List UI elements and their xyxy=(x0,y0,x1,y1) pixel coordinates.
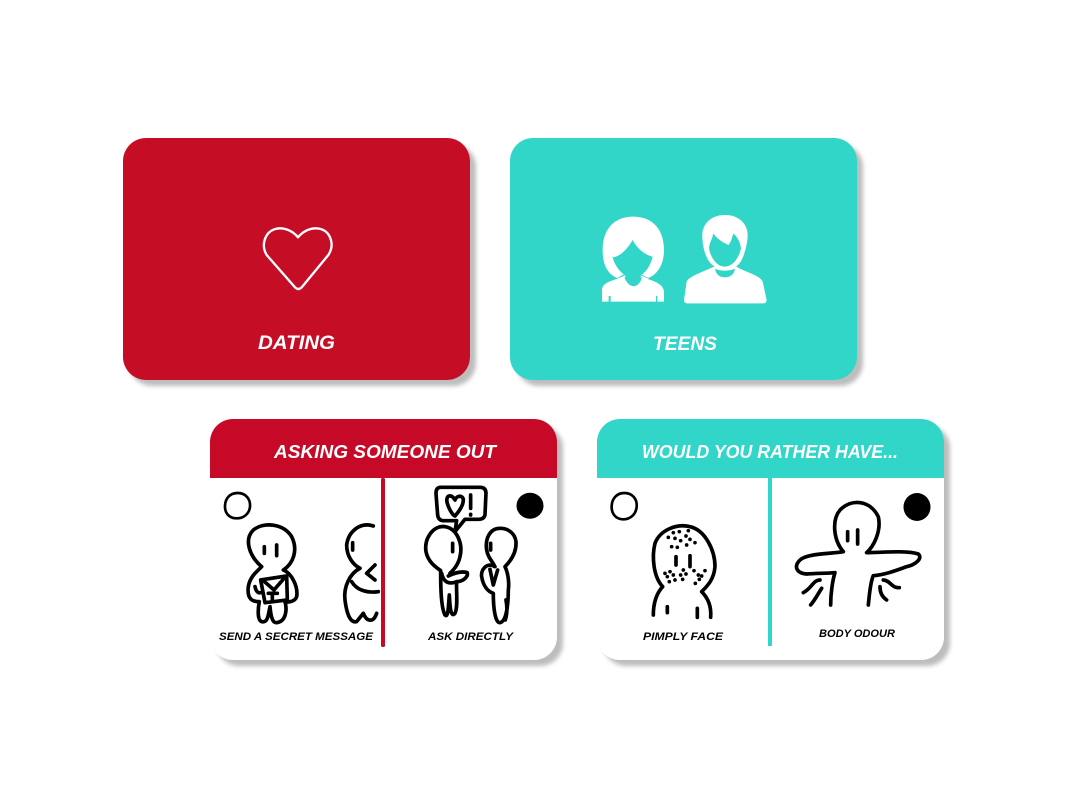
heading: dating: DATING xyxy=(258,333,335,354)
divider xyxy=(768,478,772,646)
heading: would you rather have: WOULD YOU RATHER HAVE... xyxy=(642,442,898,462)
icon: black circle xyxy=(516,493,544,519)
icon: heart xyxy=(264,228,332,289)
divider xyxy=(381,478,385,647)
illustration: body odour xyxy=(797,502,920,605)
heading: asking someone out: ASKING SOMEONE OUT xyxy=(273,442,498,462)
icon: girl and boy xyxy=(602,215,767,303)
label: pimply face: PIMPLY FACE xyxy=(643,631,724,643)
label: send a secret message: SEND A SECRET MESSAGE xyxy=(219,631,374,643)
header band xyxy=(210,419,557,478)
icon: black circle xyxy=(904,493,930,521)
panel: dating card xyxy=(123,138,470,380)
panel: asking someone out xyxy=(210,419,557,660)
heading: teens: TEENS xyxy=(653,334,717,355)
panel: teens card xyxy=(510,138,857,380)
illustration: pimply face xyxy=(612,493,715,617)
label: body odour: BODY ODOUR xyxy=(819,628,895,640)
panel: would you rather have xyxy=(597,419,944,660)
illustration: send a secret message xyxy=(225,493,378,623)
header band xyxy=(597,419,944,478)
illustration: ask directly xyxy=(426,487,516,623)
label: ask directly: ASK DIRECTLY xyxy=(427,631,515,643)
